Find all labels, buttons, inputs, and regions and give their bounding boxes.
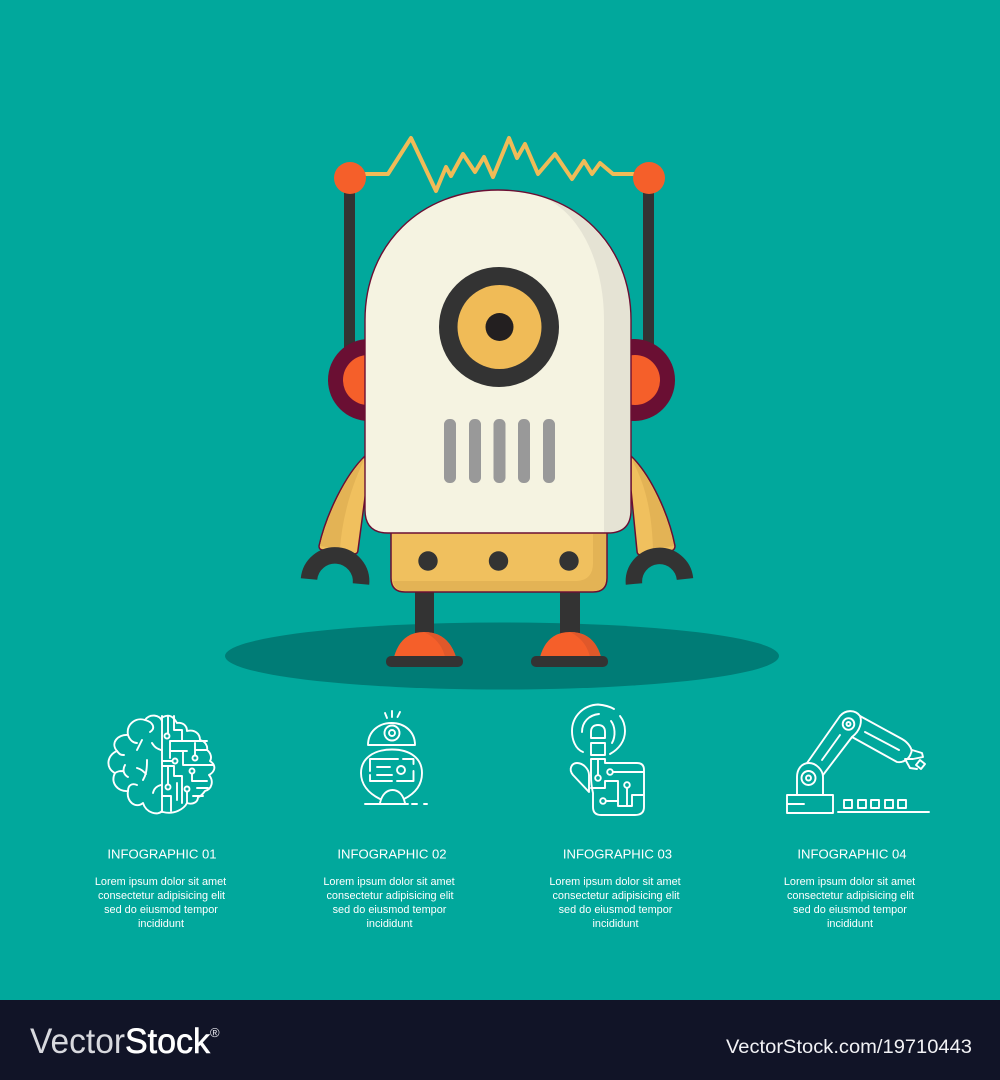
speaker grill <box>444 419 555 483</box>
column 3 text: incididunt <box>592 918 639 930</box>
robot <box>309 138 685 667</box>
body dome <box>365 190 631 533</box>
left foot <box>386 632 463 667</box>
icon: touching circuit finger <box>571 704 644 815</box>
eye <box>439 267 559 387</box>
column 3 text: INFOGRAPHIC 03 <box>563 846 672 862</box>
column 3 text: consectetur adipisicing elit <box>552 890 680 902</box>
column 4 text: incididunt <box>827 918 873 930</box>
right antenna <box>633 162 665 348</box>
left hand <box>309 555 361 584</box>
footer bar <box>0 1000 1000 1080</box>
watermark logo <box>30 1022 220 1061</box>
column 4 text: Lorem ipsum dolor sit amet <box>784 876 915 888</box>
column 4 text <box>784 846 915 930</box>
column 3 text: Lorem ipsum dolor sit amet <box>549 876 681 888</box>
left leg <box>415 590 434 636</box>
column 2 text <box>323 846 455 930</box>
icon: industrial robot arm <box>787 711 929 813</box>
icon: small robot <box>361 711 427 804</box>
right ear <box>593 339 675 421</box>
left ear <box>328 339 410 421</box>
right hand <box>634 556 685 584</box>
waist block <box>391 530 607 592</box>
right arm <box>631 456 685 584</box>
column 1 text: consectetur adipisicing elit <box>98 890 225 902</box>
column 2 text: incididunt <box>366 918 413 930</box>
column 1 text: Lorem ipsum dolor sit amet <box>95 876 226 888</box>
watermark logo: Vector <box>30 1022 125 1061</box>
column 2 text: INFOGRAPHIC 02 <box>337 846 447 862</box>
column 3 text <box>549 846 681 930</box>
right foot <box>531 632 608 667</box>
column 2 text: sed do eiusmod tempor <box>333 904 447 916</box>
column 1 text <box>95 846 226 930</box>
watermark logo: ® <box>210 1025 220 1040</box>
column 2 text: consectetur adipisicing elit <box>326 890 454 902</box>
column 2 text: Lorem ipsum dolor sit amet <box>323 876 455 888</box>
image id: VectorStock.com/19710443 <box>726 1037 972 1058</box>
left arm <box>309 456 366 584</box>
column 4 text: INFOGRAPHIC 04 <box>797 846 907 862</box>
column 4 text: consectetur adipisicing elit <box>787 890 914 902</box>
left antenna <box>334 162 366 348</box>
column 3 text: sed do eiusmod tempor <box>559 904 673 916</box>
watermark logo: Stock <box>125 1022 210 1061</box>
column 4 text: sed do eiusmod tempor <box>793 904 907 916</box>
column 1 text: INFOGRAPHIC 01 <box>107 846 217 862</box>
column 1 text: sed do eiusmod tempor <box>104 904 218 916</box>
ground shadow <box>225 622 779 690</box>
electric wave between antennas <box>366 138 635 191</box>
column 1 text: incididunt <box>138 918 184 930</box>
right leg <box>560 590 580 636</box>
icon: brain with circuits <box>108 716 214 813</box>
